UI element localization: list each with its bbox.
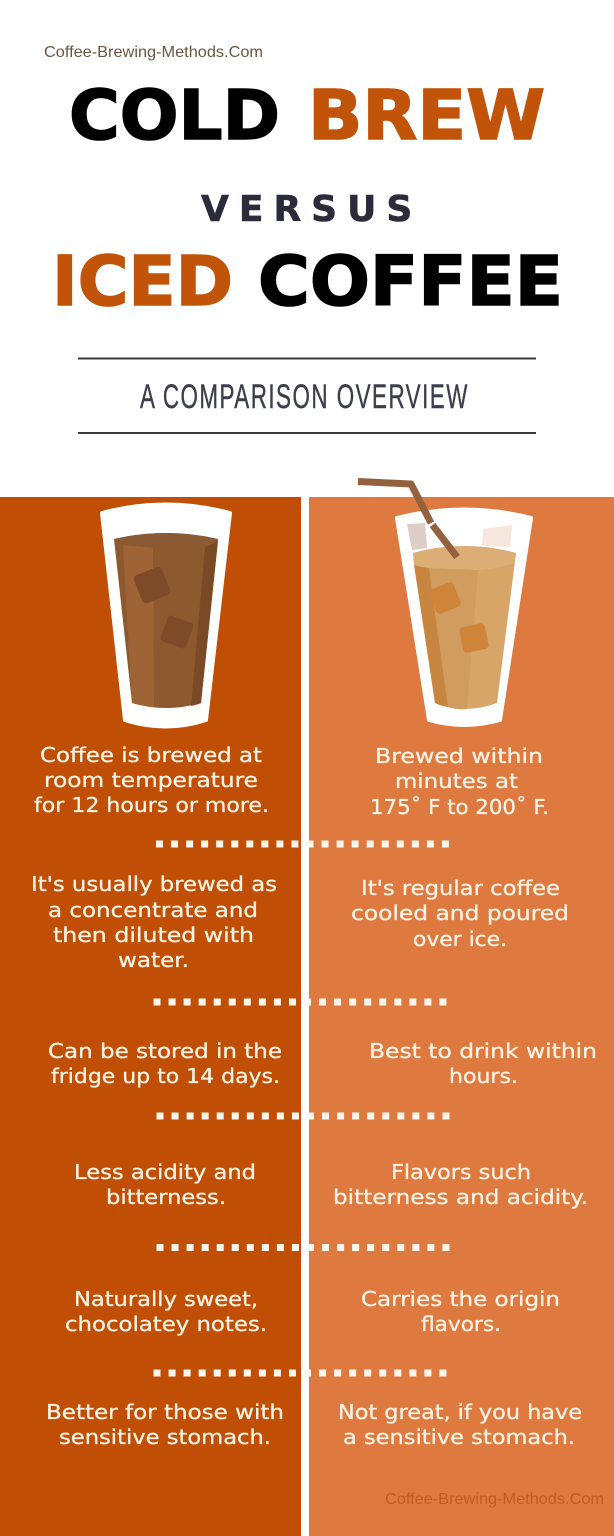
- text: cold brew concentrate: water.: [118, 948, 189, 972]
- text: cold brew stomach: sensitive stomach.: [59, 1425, 271, 1449]
- text: iced coffee regular: [351, 876, 569, 951]
- text: cold brew flavor: Naturally sweet,: [74, 1287, 258, 1311]
- text: iced coffee brewing: minutes at: [395, 769, 518, 793]
- watermark: top: Coffee-Brewing-Methods.Com: [44, 44, 263, 61]
- text: cold brew concentrate: then diluted with: [53, 923, 254, 947]
- dotted dividers: [154, 844, 450, 1373]
- text: cold brew brewing: [34, 743, 269, 817]
- text: iced coffee storage: hours.: [449, 1064, 518, 1088]
- text: cold brew flavor: [65, 1287, 267, 1336]
- text: cold brew concentrate: [31, 872, 277, 972]
- text: iced coffee regular: over ice.: [413, 927, 507, 951]
- subtitle: A COMPARISON OVERVIEW: [140, 378, 469, 416]
- text: cold brew concentrate: a concentrate and: [48, 898, 258, 922]
- text: cold brew acidity: [74, 1160, 256, 1209]
- text: iced coffee regular: cooled and poured: [351, 901, 569, 925]
- text: cold brew flavor: chocolatey notes.: [65, 1312, 267, 1336]
- text: iced coffee flavor: [361, 1287, 560, 1336]
- text: iced coffee regular: It's regular coffee: [361, 876, 560, 900]
- text: cold brew storage: Can be stored in the: [48, 1039, 282, 1063]
- text: cold brew brewing: Coffee is brewed at: [40, 743, 262, 767]
- title: iced coffee line: COFFEE: [258, 242, 563, 322]
- text: cold brew concentrate: It's usually brewed as: [31, 872, 277, 896]
- text: iced coffee storage: [369, 1039, 597, 1088]
- text: cold brew acidity: Less acidity and: [74, 1160, 256, 1184]
- watermark: bottom: Coffee-Brewing-Methods.Com: [385, 1491, 604, 1508]
- text: iced coffee acidity: Flavors such: [391, 1160, 531, 1184]
- text: iced coffee storage: Best to drink within: [369, 1039, 597, 1063]
- text: iced coffee brewing: Brewed within: [375, 744, 543, 768]
- title: cold brew line: [69, 76, 545, 156]
- title: [52, 76, 563, 322]
- text: cold brew brewing: for 12 hours or more.: [34, 793, 269, 817]
- text: cold brew stomach: [46, 1400, 284, 1449]
- title: cold brew line: COLD: [69, 76, 280, 156]
- text: iced coffee stomach: Not great, if you have: [338, 1400, 582, 1424]
- text: cold brew storage: fridge up to 14 days.: [51, 1064, 280, 1088]
- text: iced coffee acidity: [333, 1160, 588, 1209]
- title: versus: VERSUS: [201, 189, 422, 230]
- text: iced coffee flavor: flavors.: [421, 1312, 501, 1336]
- title: iced coffee line: ICED: [52, 242, 233, 322]
- text: iced coffee acidity: bitterness and acidity.: [333, 1185, 588, 1209]
- text: cold brew brewing: room temperature: [44, 768, 258, 792]
- text: cold brew acidity: bitterness.: [106, 1185, 226, 1209]
- text: cold brew storage: [48, 1039, 282, 1088]
- text: iced coffee stomach: [338, 1400, 582, 1449]
- icon: cold brew glass: [102, 504, 230, 726]
- panel background: cold brew: [0, 497, 301, 1536]
- panel: iced coffee: [309, 482, 614, 1536]
- text: cold brew stomach: Better for those with: [46, 1400, 284, 1424]
- text: iced coffee brewing: 175˚ F to 200˚ F.: [370, 795, 549, 819]
- text: iced coffee stomach: a sensitive stomach.: [343, 1425, 575, 1449]
- panel: cold brew: [0, 497, 301, 1536]
- title: iced coffee line: [52, 242, 563, 322]
- title: cold brew line: BREW: [308, 76, 545, 156]
- text: iced coffee flavor: Carries the origin: [361, 1287, 560, 1311]
- icon: straw: [358, 482, 457, 557]
- panel background: iced coffee: [309, 497, 614, 1536]
- text: iced coffee brewing: [370, 744, 549, 819]
- icon: iced coffee glass: [358, 482, 531, 725]
